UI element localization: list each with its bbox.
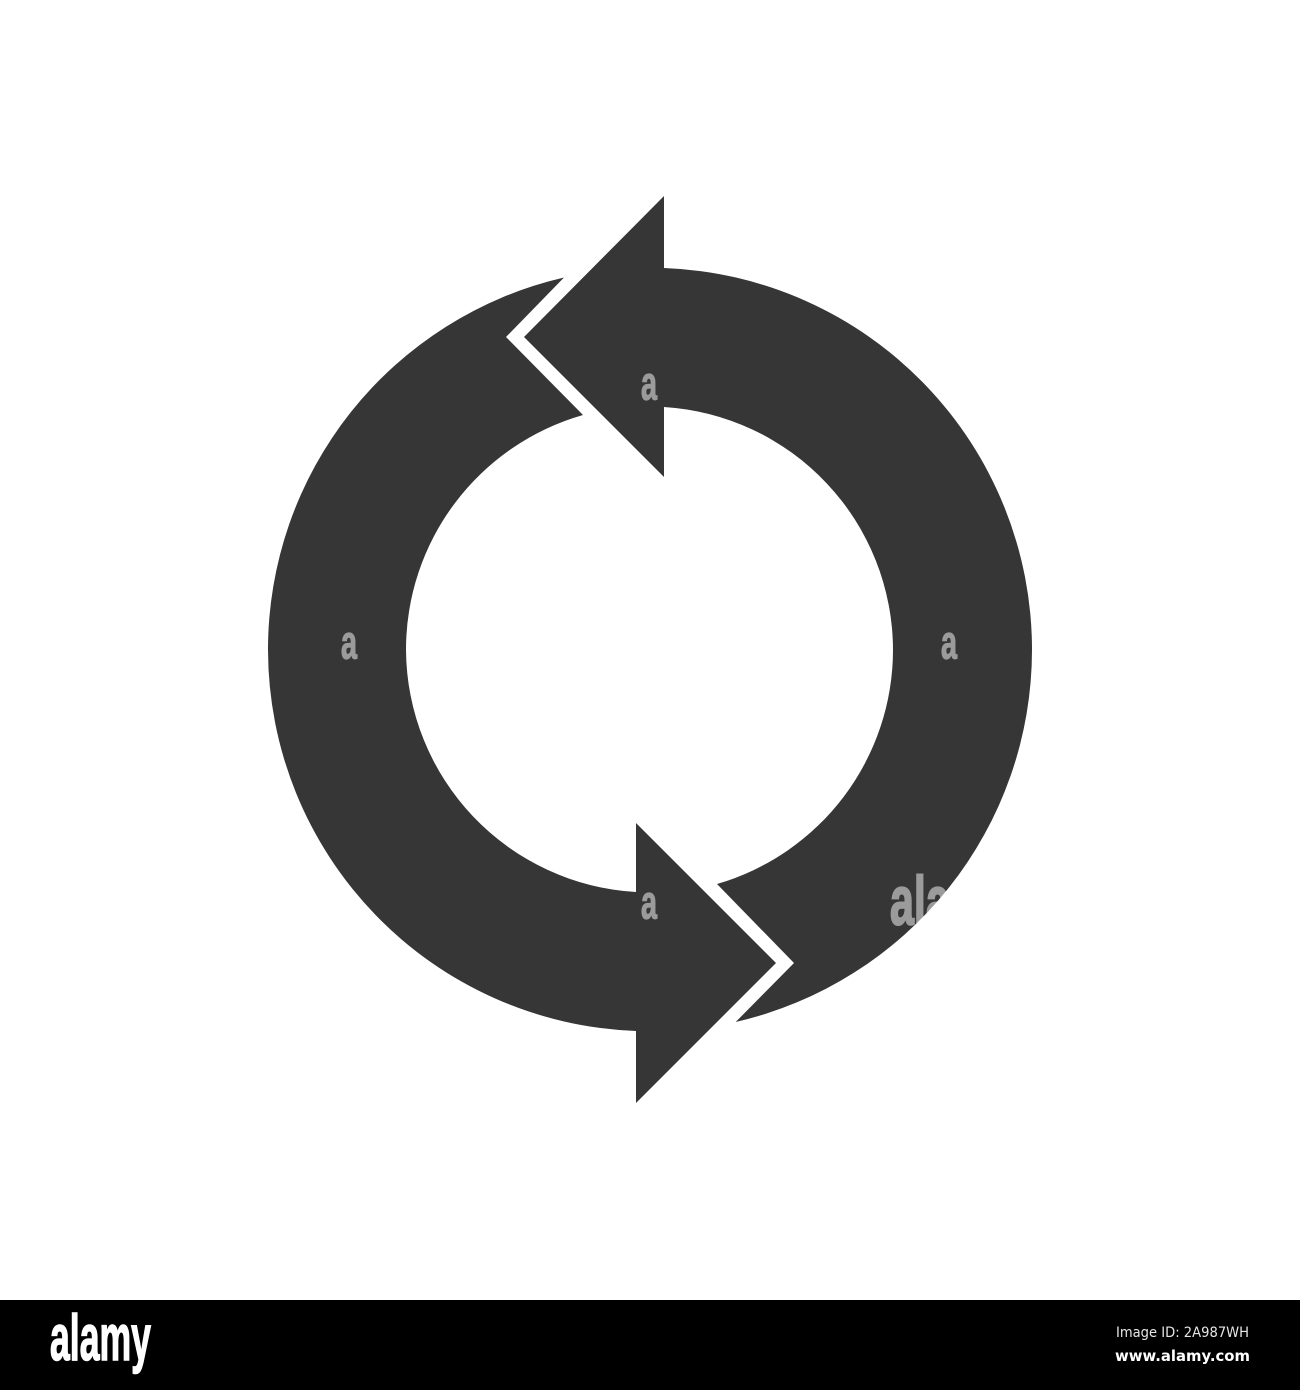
arrow: bottom arrow pointing right, curving clockwise around the left side bbox=[268, 278, 776, 1103]
watermark word clipped by the ring: alamy bbox=[890, 862, 1012, 940]
icon: circular arrows bbox=[268, 196, 1032, 1103]
watermark letter right: a bbox=[941, 616, 958, 668]
watermark letter top: a bbox=[641, 356, 658, 410]
website url: www.alamy.com bbox=[1115, 1347, 1250, 1365]
arrow: top arrow pointing left, curving clockwise around the right side bbox=[524, 196, 1032, 1022]
footer logo: alamy bbox=[50, 1301, 151, 1374]
watermark letter left: a bbox=[341, 616, 358, 668]
image id: Image ID: 2A987WH bbox=[1116, 1325, 1249, 1341]
watermark: repeated alamy letters over the icon bbox=[341, 356, 1012, 940]
watermark letter bottom: a bbox=[641, 876, 658, 928]
footer bar bbox=[0, 1300, 1300, 1390]
